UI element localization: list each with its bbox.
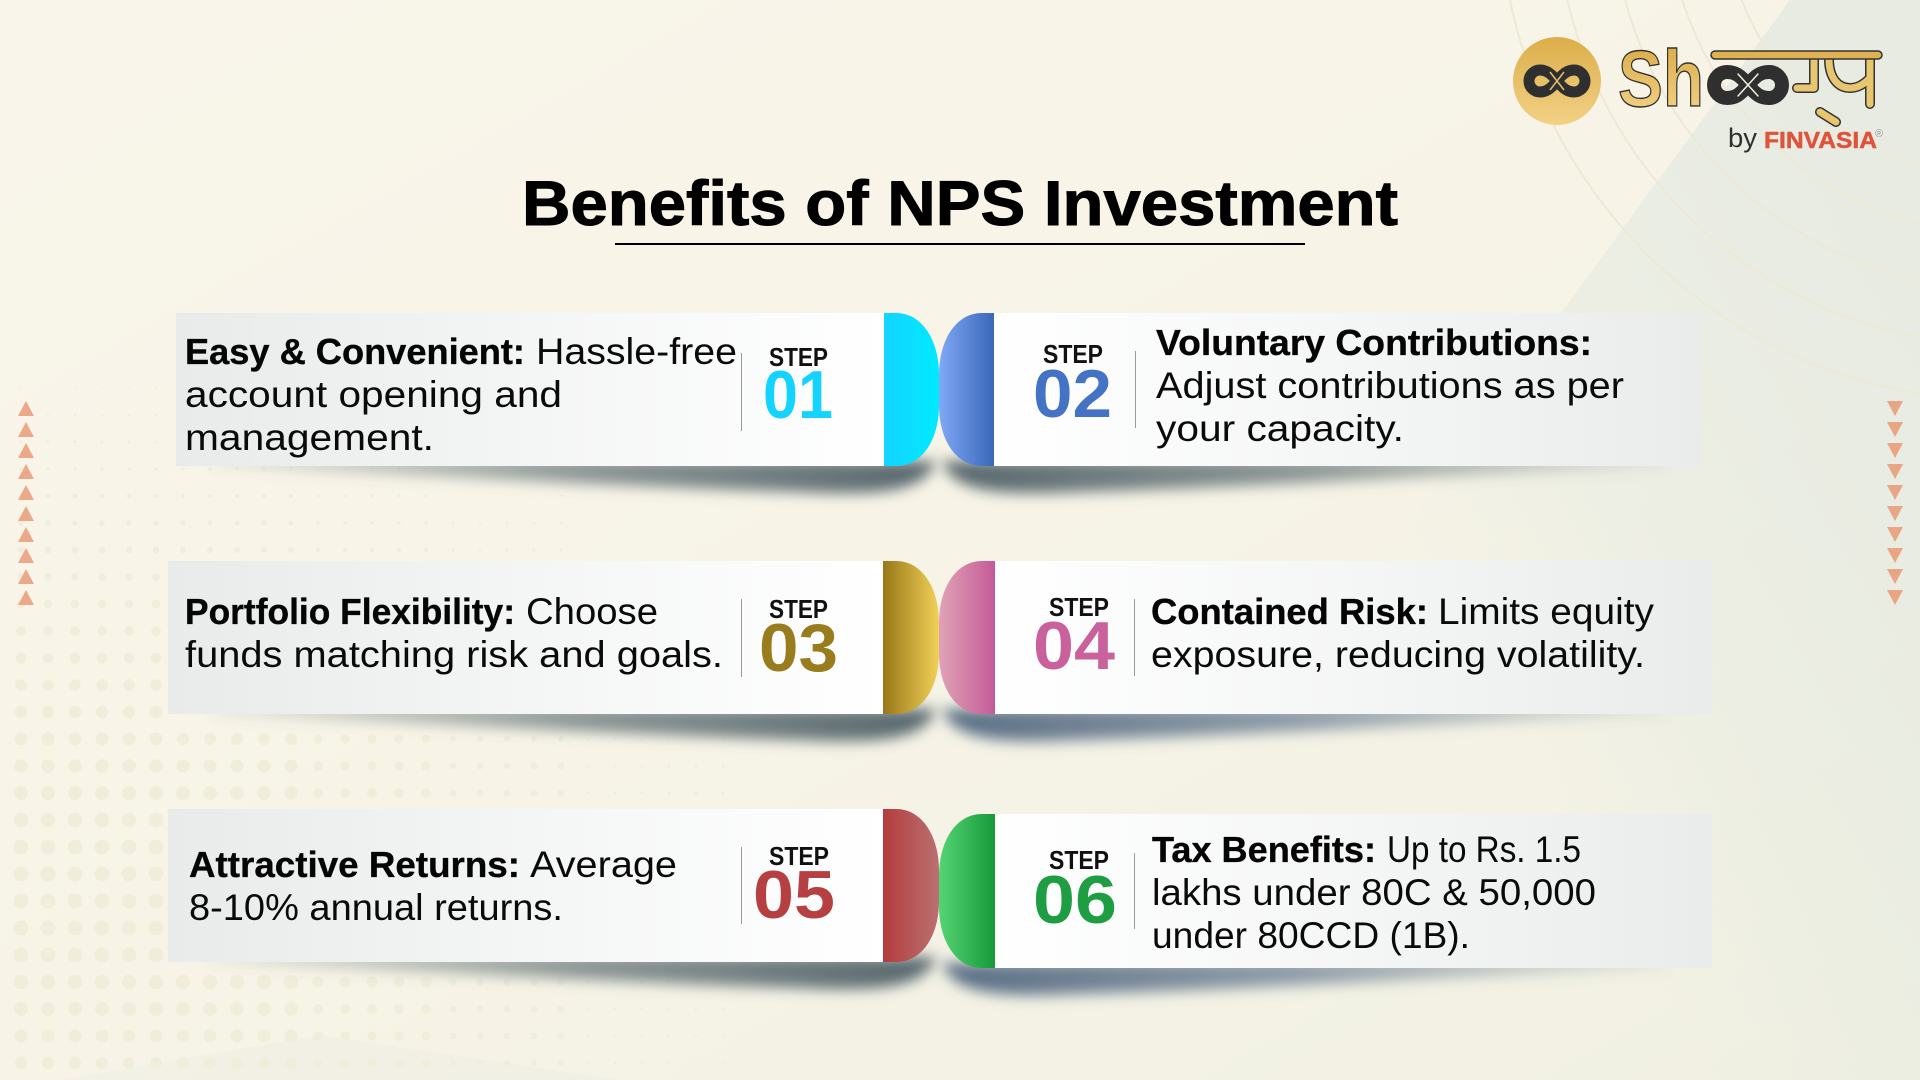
card shadow	[942, 704, 1668, 741]
description: management.	[185, 417, 434, 458]
description: Contained Risk:	[1151, 591, 1428, 632]
step label: STEP	[769, 841, 829, 871]
description: Limits equity	[1438, 591, 1655, 632]
description: account opening and	[185, 374, 562, 415]
coloured cap	[883, 809, 939, 962]
coloured cap	[939, 814, 995, 968]
coloured cap	[939, 561, 995, 714]
icon: left column of up triangles	[18, 401, 34, 605]
panel: step 04	[939, 561, 1712, 741]
description	[189, 844, 677, 928]
description	[1156, 322, 1624, 449]
description: Attractive Returns:	[189, 844, 520, 885]
description: your capacity.	[1156, 408, 1404, 449]
description: Average	[530, 844, 677, 885]
description: funds matching risk and goals.	[185, 634, 723, 675]
registered mark: ®	[1875, 128, 1883, 140]
description: exposure, reducing volatility.	[1151, 634, 1645, 675]
card shadow	[210, 952, 936, 989]
panel: step 06	[939, 814, 1712, 995]
step number: 05	[753, 857, 835, 933]
coloured cap	[939, 313, 994, 466]
description: Choose	[526, 591, 658, 632]
step label: STEP	[1049, 845, 1109, 875]
card shadow	[210, 456, 936, 493]
icon: gold circle with infinity	[1513, 37, 1601, 125]
card body	[993, 313, 1701, 466]
step label: STEP	[769, 594, 828, 624]
step number: 02	[1033, 356, 1112, 432]
panel: step 03	[168, 561, 939, 741]
description: under 80CCD (1B).	[1152, 915, 1470, 956]
card body	[176, 313, 885, 466]
divider	[741, 847, 742, 924]
title: Benefits of NPS Investment	[522, 169, 1398, 239]
description: Adjust contributions as per	[1156, 365, 1624, 406]
description	[185, 331, 737, 458]
logo wordmark Sh: Sh	[1618, 34, 1704, 123]
step number: 01	[763, 357, 833, 433]
step number: 04	[1033, 608, 1115, 684]
card body	[994, 814, 1712, 968]
description: lakhs under 80C & 50,000	[1152, 872, 1596, 913]
logo text: Finvasia: FINVASIA	[1764, 127, 1877, 153]
description: Portfolio Flexibility:	[185, 591, 515, 632]
description: Up to Rs. 1.5	[1387, 829, 1581, 870]
divider	[1134, 599, 1135, 676]
logo: Shoonya by Finvasia	[1513, 34, 1883, 153]
panel: step 02	[939, 313, 1701, 493]
divider	[741, 599, 742, 677]
card shadow	[210, 704, 936, 741]
card shadow	[942, 958, 1668, 995]
description: Hassle-free	[536, 331, 737, 372]
coloured cap	[884, 313, 939, 466]
card shadow	[942, 456, 1668, 493]
divider	[741, 353, 742, 431]
logo text: by: by	[1728, 123, 1757, 153]
divider	[1134, 853, 1135, 929]
description	[1152, 829, 1596, 956]
step label: STEP	[769, 342, 828, 372]
description	[1151, 591, 1655, 675]
card body	[168, 809, 884, 962]
icon: right column of down triangles	[1887, 401, 1903, 605]
description	[185, 591, 723, 675]
description: Tax Benefits:	[1152, 829, 1376, 870]
step label: STEP	[1049, 592, 1109, 622]
description: Voluntary Contributions:	[1156, 322, 1592, 363]
description: Easy & Convenient:	[185, 331, 525, 372]
step number: 06	[1033, 862, 1117, 938]
card body	[994, 561, 1712, 714]
divider	[1135, 351, 1136, 428]
step number: 03	[759, 610, 838, 686]
coloured cap	[883, 561, 939, 714]
description: 8-10% annual returns.	[189, 887, 563, 928]
card body	[168, 561, 884, 714]
logo mark: large infinity and script strokes	[1711, 51, 1882, 122]
panel: step 05	[168, 809, 939, 989]
panel: step 01	[176, 313, 939, 493]
step label: STEP	[1043, 339, 1103, 369]
